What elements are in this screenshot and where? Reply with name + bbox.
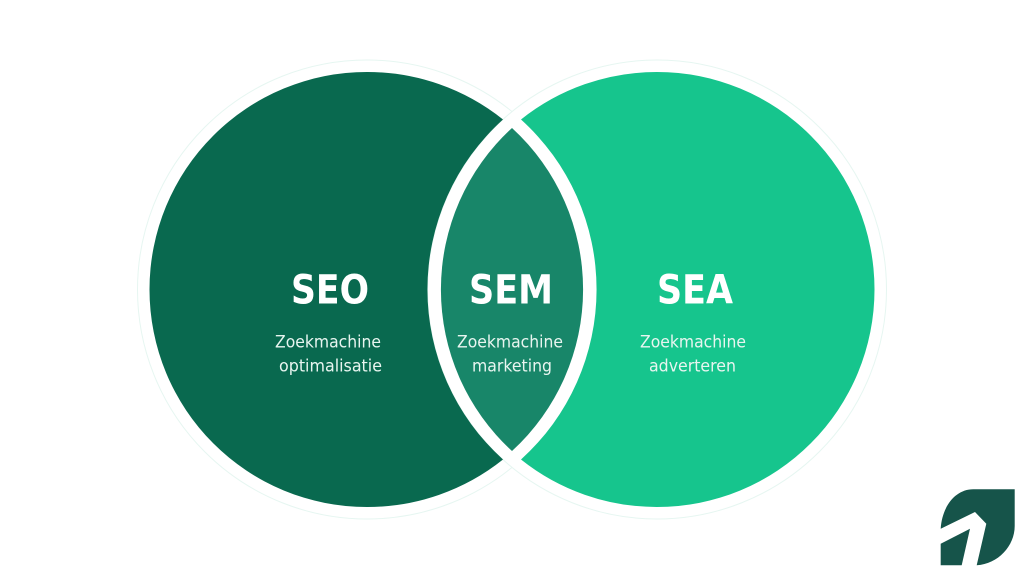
SEA label <box>640 268 746 376</box>
text: Zoekmachine marketing: Zoekmachine <box>457 332 563 352</box>
circle: SEA <box>521 72 875 507</box>
lens: SEM overlap <box>441 128 583 451</box>
text: Zoekmachine adverteren <box>640 332 746 376</box>
text: Zoekmachine optimalisatie: optimalisatie <box>279 356 382 376</box>
heading: SEM: SEM <box>469 268 553 314</box>
text: Zoekmachine optimalisatie <box>275 332 382 376</box>
text: Zoekmachine marketing: marketing <box>472 356 552 376</box>
circle: SEO <box>150 72 503 507</box>
outer outline: right circle <box>428 60 886 519</box>
text: Zoekmachine adverteren: adverteren <box>649 356 736 376</box>
text: Zoekmachine optimalisatie: Zoekmachine <box>275 332 381 352</box>
icon: leaf arrow logo <box>941 489 1015 565</box>
SEM label <box>457 268 563 376</box>
text: Zoekmachine adverteren: Zoekmachine <box>640 332 746 352</box>
heading: SEA: SEA <box>657 268 733 314</box>
outer outline: left circle <box>138 60 596 519</box>
heading: SEO: SEO <box>291 268 369 314</box>
text: Zoekmachine marketing <box>457 332 563 376</box>
SEO label <box>275 268 382 376</box>
